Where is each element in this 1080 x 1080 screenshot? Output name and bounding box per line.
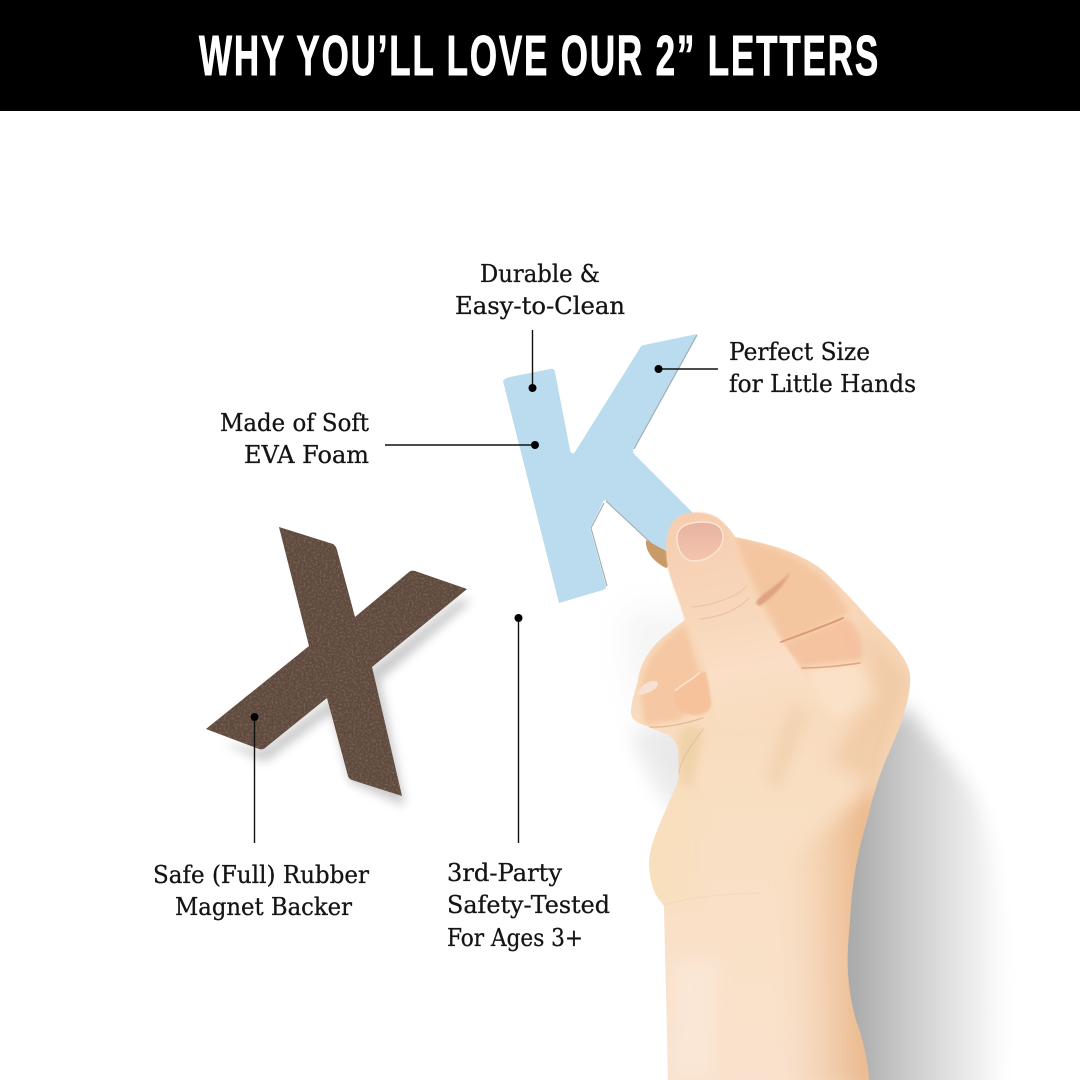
callout: soft EVA foam: Made of Soft [220,409,369,437]
palm and thumb creases [650,586,860,905]
callout: safety tested: For Ages 3+ [447,924,583,952]
callout: safety tested [447,614,610,952]
callout: durable and easy to clean [455,260,625,392]
blue letter K [503,334,710,603]
index finger segment [674,672,712,715]
thumbnail [677,522,723,561]
finger behind letter [646,540,680,568]
header banner [0,0,1080,111]
fold behind thumb [755,572,790,606]
callout: durable and easy to clean: Easy-to-Clean [455,292,625,320]
fingertip nail [637,681,658,695]
hand cast shadow [625,610,1003,1080]
callout: rubber magnet backer [153,713,369,921]
callout: safety tested: Safety-Tested [447,891,610,919]
brown letter X with shadow [206,527,472,806]
callout: perfect size [654,338,916,398]
X shadow [222,600,472,806]
callout: perfect size: for Little Hands [729,370,916,398]
callout: soft EVA foam: EVA Foam [244,441,369,469]
thumb [666,513,813,736]
hand shading [640,537,915,1080]
hand silhouette [631,513,910,1080]
callout: soft EVA foam [220,409,539,469]
callout: durable and easy to clean: Durable & [480,260,600,288]
K edge thickness [591,335,697,586]
callout: rubber magnet backer: Safe (Full) Rubber [153,861,369,889]
callout: perfect size: Perfect Size [729,338,870,366]
callout: safety tested: 3rd-Party [447,859,562,887]
callout: rubber magnet backer: Magnet Backer [175,893,352,921]
X shape [206,527,467,796]
hand holding the letter [631,513,915,1080]
